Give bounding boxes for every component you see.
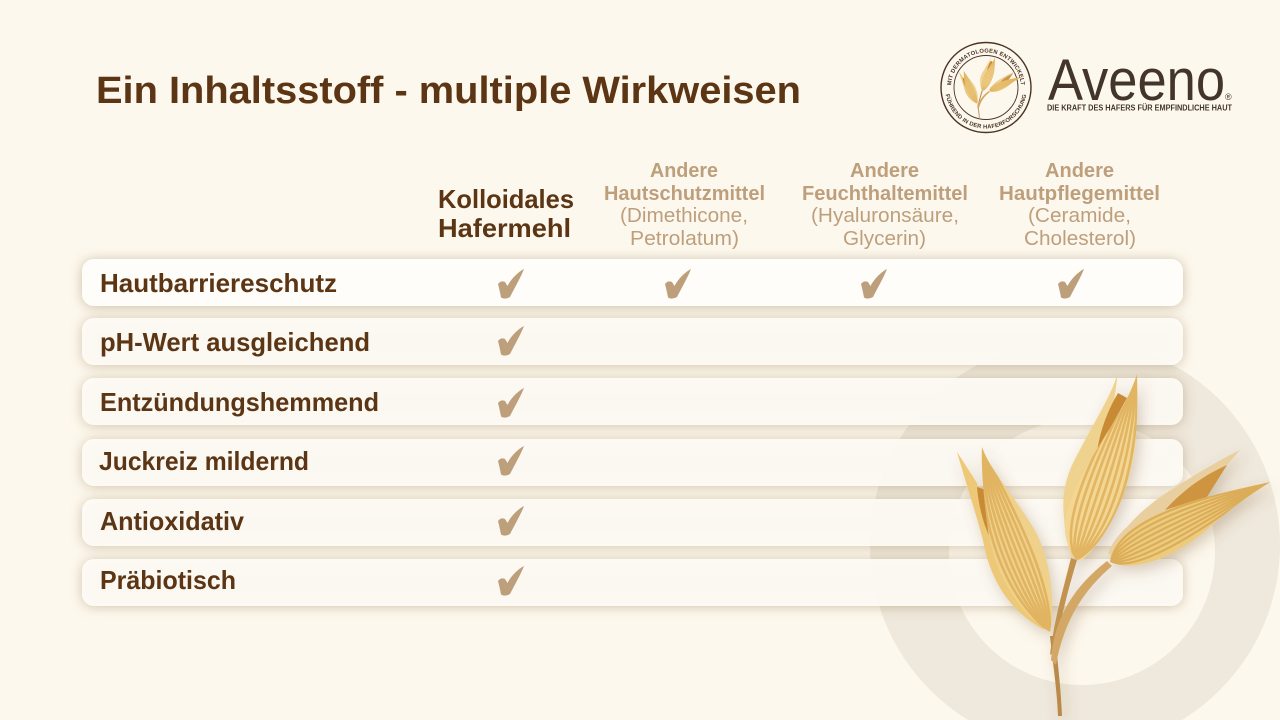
column header: Andere Hautpflegemittel: (Ceramide, [1028, 205, 1131, 227]
badge: dermatologist seal: FÜHREND IN DER HAFERFORSCHUNG [946, 94, 1026, 129]
row: pH-Wert ausgleichend [82, 318, 1183, 365]
column header: Andere Hautpflegemittel: Hautpflegemittel [999, 183, 1160, 205]
row: Entzündungshemmend [82, 378, 1183, 425]
column header: Andere Feuchthaltemittel: Glycerin) [843, 228, 926, 250]
column header: Andere Hautpflegemittel [999, 160, 1160, 250]
badge: dermatologist seal: MIT DERMATOLOGEN ENTWICKELT [947, 48, 1025, 86]
column header: Andere Hautschutzmittel: Andere [650, 160, 718, 182]
column header: Andere Hautschutzmittel [604, 160, 765, 250]
column header: Andere Hautschutzmittel: Petrolatum) [630, 228, 739, 250]
row: Hautbarriereschutz: Hautbarriereschutz [100, 268, 337, 298]
column header: Kolloidales Hafermehl: Kolloidales [438, 184, 574, 214]
background circles [870, 340, 1280, 720]
column header: Kolloidales Hafermehl: Hafermehl [438, 213, 571, 243]
row: Präbiotisch [82, 559, 1183, 606]
column header: Andere Hautschutzmittel: Hautschutzmittel [604, 183, 765, 205]
column header: Andere Feuchthaltemittel: Andere [850, 160, 919, 182]
logo: Aveeno: ® [1225, 92, 1232, 102]
illustration: oat sprig [957, 372, 1270, 716]
title: Ein Inhaltsstoff - multiple Wirkweisen [96, 70, 801, 112]
row: Hautbarriereschutz [82, 259, 1183, 306]
row: Antioxidativ: Antioxidativ [100, 506, 245, 536]
column header: Andere Hautpflegemittel: Andere [1045, 160, 1114, 182]
row: pH-Wert ausgleichend: pH-Wert ausgleichend [100, 327, 370, 357]
row: Antioxidativ [82, 499, 1183, 546]
column header: Kolloidales Hafermehl [438, 184, 574, 243]
column header: Andere Hautschutzmittel: (Dimethicone, [620, 205, 748, 227]
column header: Andere Feuchthaltemittel: Feuchthaltemittel [802, 183, 968, 205]
row: Präbiotisch: Präbiotisch [100, 565, 236, 595]
row: Entzündungshemmend: Entzündungshemmend [100, 387, 379, 417]
column header: Andere Hautpflegemittel: Cholesterol) [1024, 228, 1136, 250]
row: Juckreiz mildernd: Juckreiz mildernd [99, 446, 309, 476]
logo: Aveeno: Aveeno [1048, 48, 1225, 113]
logo: Aveeno: DIE KRAFT DES HAFERS FÜR EMPFINDLICHE HAUT [1047, 102, 1233, 112]
row: Juckreiz mildernd [82, 439, 1183, 486]
column header: Andere Feuchthaltemittel [802, 160, 968, 250]
badge: dermatologist seal [940, 42, 1032, 134]
column header: Andere Feuchthaltemittel: (Hyaluronsäure, [811, 205, 959, 227]
